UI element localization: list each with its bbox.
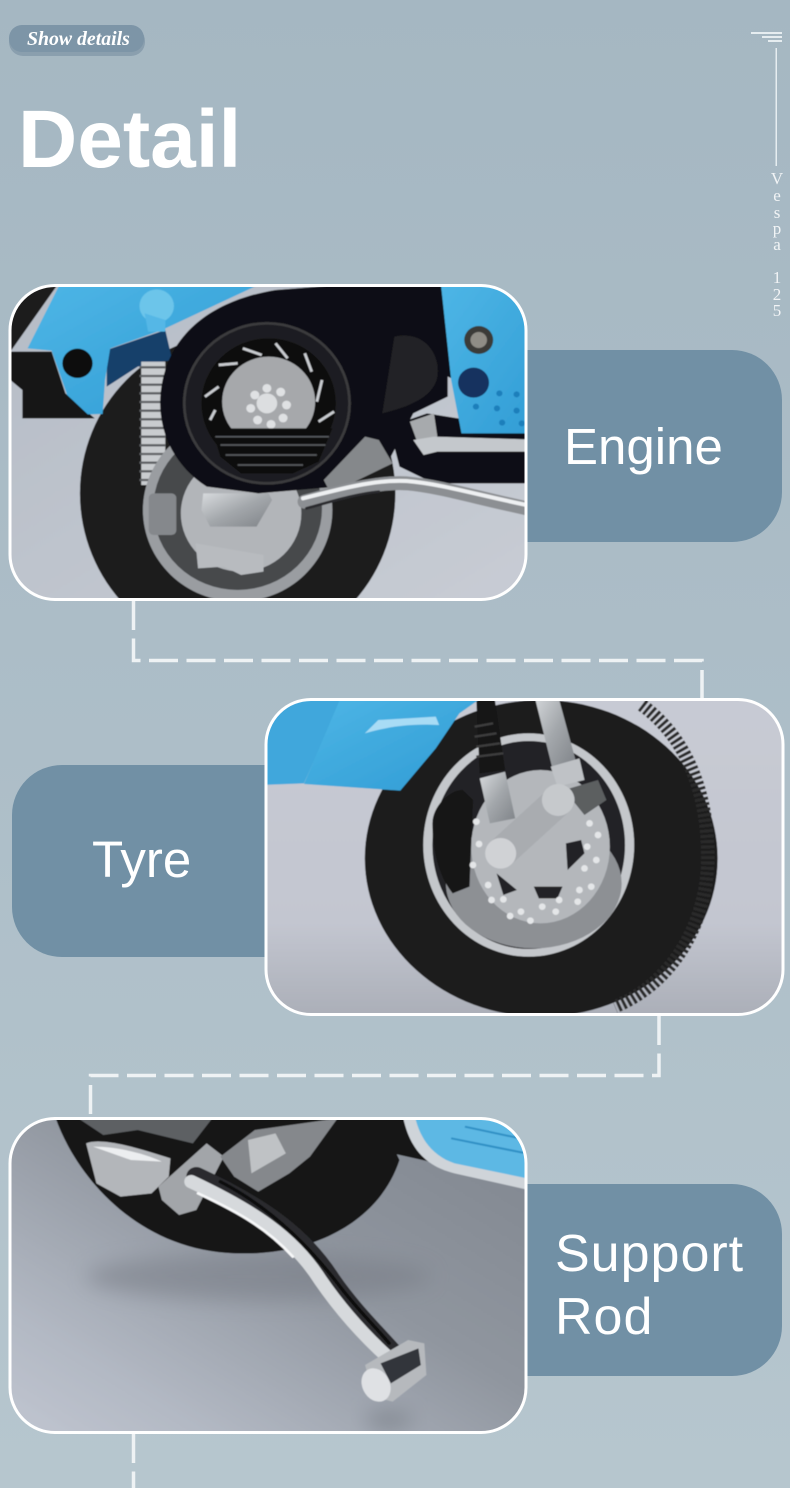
label: Support Rod [500,1184,782,1376]
lever foot [361,1340,426,1402]
kick lever [303,481,551,513]
label: Support Rod: Support [555,1225,744,1283]
side label: Vespa 125 [751,32,784,320]
connector: tyre to support rod [90,1016,659,1117]
label: Engine [500,350,782,542]
photo panel: engine [8,284,528,601]
side label: Vespa 125: a [773,235,781,254]
side label: Vespa 125: V [771,169,784,188]
side label: Vespa 125: e [773,186,781,205]
badge: Show details [9,25,145,56]
tyre [55,1117,400,1254]
shadow [86,1253,431,1300]
badge: Show details: Show details [27,28,130,50]
right blue body [394,287,524,484]
engine housing [76,1117,338,1215]
wheel rim [423,733,634,957]
left blue body [7,283,262,418]
fender [263,697,483,791]
fan housing [160,283,455,493]
shock and fork [475,693,606,823]
photo panel: tyre [260,690,790,1023]
label: Engine: Engine [564,418,723,475]
connector: support rod onward [132,1434,135,1488]
side label: Vespa 125: s [774,203,780,222]
tyre [79,346,396,598]
connector: engine to tyre [134,601,702,698]
kickstand lever [191,1177,396,1358]
side label: Vespa 125: p [773,219,781,238]
label: Tyre [12,765,300,957]
brake drum [142,445,334,598]
title: Detail [18,94,241,185]
side label: Vespa 125: 1 [773,268,781,287]
label: Tyre: Tyre [92,831,191,888]
tyre [365,700,718,1017]
side label: Vespa 125: 2 [773,285,781,304]
photo panel: support rod [8,1117,528,1434]
side label: Vespa 125: 5 [773,301,781,320]
spring [138,360,166,486]
footboard [380,1120,524,1190]
axle arm [485,784,574,869]
label: Support Rod: Rod [555,1288,653,1346]
